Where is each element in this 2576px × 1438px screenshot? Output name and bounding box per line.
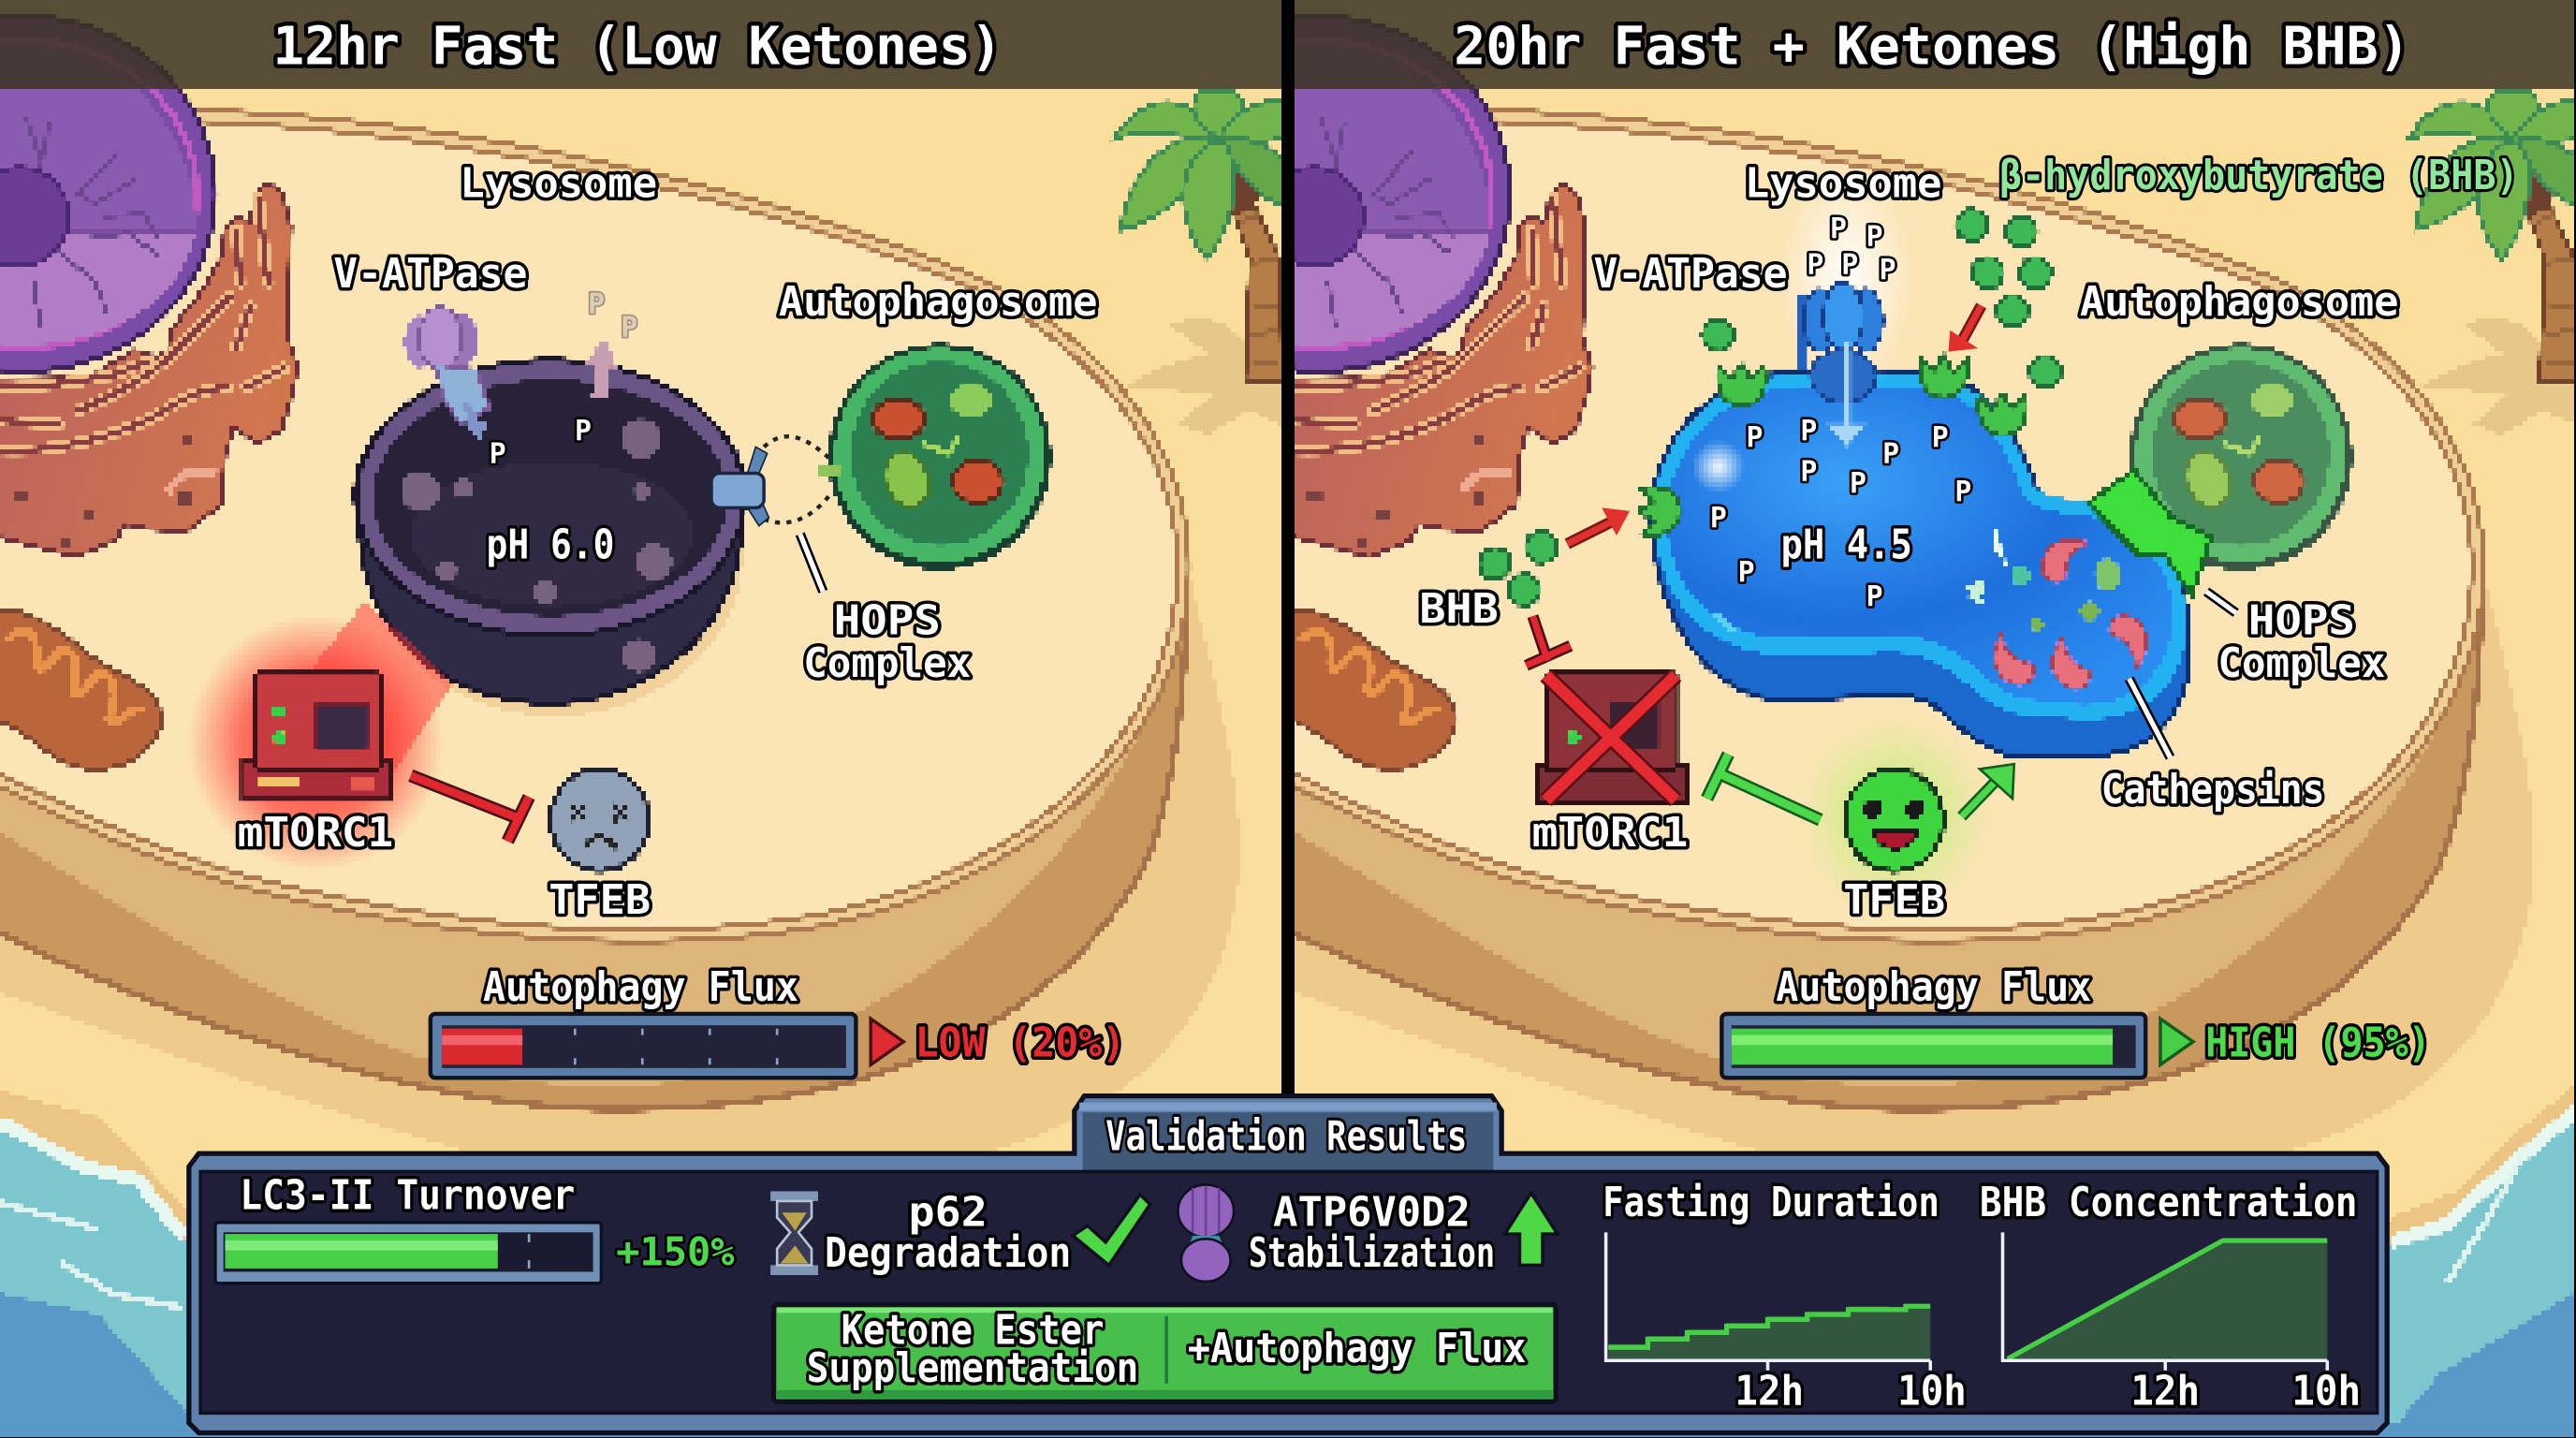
- protons in lysosome: P: [1800, 456, 1817, 489]
- arrow: TFEB activates lysosome: [1962, 764, 2014, 816]
- icon: mTORC1 inhibited: [1538, 674, 1686, 803]
- icon: up arrow: [1505, 1193, 1558, 1265]
- protons in lysosome: P: [575, 415, 592, 448]
- title bar right: [1292, 0, 2576, 91]
- protons above pump: [1807, 213, 1896, 286]
- icon: nucleus: [1129, 17, 1510, 372]
- faded protons: P: [588, 288, 605, 321]
- labels: Autophagosome: [2080, 278, 2398, 326]
- protons above pump: P: [1866, 221, 1883, 254]
- protons above pump: P: [1830, 213, 1847, 245]
- results tab: Validation Results: [1105, 1113, 1467, 1161]
- labels: V-ATPase: [333, 250, 527, 298]
- fused autolysosome, active: [1651, 372, 2189, 756]
- ketone ester callout: [774, 1305, 1556, 1401]
- ketone ester callout: Supplementation: [807, 1344, 1138, 1392]
- icon: palm tree: [1109, 89, 1281, 435]
- p62 degradation metric: Degradation: [825, 1229, 1071, 1277]
- lysosome, inactive: [355, 360, 746, 716]
- protons in lysosome: [1710, 415, 1971, 614]
- TFEB glow: [1793, 714, 1996, 918]
- protons in lysosome: P: [1932, 421, 1949, 454]
- protons in lysosome: P: [1882, 438, 1899, 471]
- labels: BHB: [1419, 585, 1499, 633]
- ketone ester callout: Ketone Ester: [842, 1307, 1104, 1355]
- panel frame with tab: [189, 1096, 2387, 1432]
- title right: 20hr Fast + Ketones (High BHB): [1454, 16, 2410, 77]
- icon: endoplasmic reticulum: [0, 183, 298, 557]
- ocean and wet sand: [0, 1084, 2576, 1438]
- chart: fasting duration: [1603, 1179, 1967, 1416]
- left scene artwork: [0, 0, 1281, 1208]
- labels: Lysosome: [1745, 160, 1942, 208]
- protons above pump: P: [1841, 249, 1858, 282]
- protons in lysosome: P: [1954, 476, 1971, 508]
- wet sand left: [0, 1091, 213, 1282]
- protons in lysosome: P: [1738, 556, 1755, 589]
- ocean: right corner: [2374, 1110, 2576, 1438]
- chart: fasting duration: 10h: [1897, 1368, 1967, 1416]
- pH value: pH 6.0: [487, 521, 614, 569]
- labels: [238, 160, 1097, 924]
- BHB molecules: [1479, 210, 2061, 606]
- icon: V-ATPase, weak: [404, 307, 490, 440]
- icon: mitochondrion: [1286, 609, 1456, 770]
- V-ATPase glow: [1778, 161, 1915, 398]
- chart: BHB concentration: BHB Concentration: [1980, 1179, 2358, 1226]
- faded proton arrow: [585, 337, 618, 399]
- protons in lysosome: [490, 415, 592, 471]
- sea strip below results panel: [165, 1423, 2415, 1438]
- faded protons: [588, 288, 637, 345]
- protons in lysosome: P: [1866, 581, 1883, 614]
- inhibition: TFEB to mTORC1: [1707, 755, 1821, 820]
- cell on beach: [0, 0, 1281, 1208]
- icon: TFEB active face: [1845, 769, 1943, 871]
- labels: TFEB: [549, 876, 651, 924]
- title left: 12hr Fast (Low Ketones): [272, 16, 1003, 77]
- title bar left: [0, 0, 1284, 91]
- labels: Autophagosome: [779, 278, 1097, 326]
- cell on beach: [1229, 0, 2576, 1438]
- leader line: HOPS: [2206, 592, 2236, 613]
- icon: endoplasmic reticulum: [1278, 183, 1592, 557]
- labels: TFEB: [1843, 876, 1945, 924]
- labels: Complex: [2217, 639, 2385, 687]
- right scene artwork: [1129, 0, 2576, 1438]
- protons in lysosome: P: [490, 438, 506, 471]
- icon: nucleus: [0, 17, 215, 372]
- ocean: left corner: [0, 1123, 205, 1438]
- labels: V-ATPase: [1593, 250, 1788, 298]
- ketone ester callout: +Autophagy Flux: [1188, 1325, 1526, 1372]
- flux gauge: high: Autophagy Flux: [1776, 963, 2091, 1011]
- ATP6V0D2 stabilization metric: Stabilization: [1249, 1229, 1495, 1277]
- leader line: HOPS: [800, 534, 823, 592]
- left panel annotations: [238, 16, 1125, 1078]
- LC3-II turnover metric: LC3-II Turnover: [240, 1172, 575, 1220]
- LC3-II turnover metric: +150%: [616, 1228, 735, 1274]
- autophagosome: [2130, 344, 2352, 570]
- BHB receptors: [1638, 355, 2027, 535]
- flux gauge: high: HIGH (95%): [2205, 1020, 2431, 1067]
- HOPS tether, failed fusion: [711, 436, 842, 526]
- cathepsins and debris: [1965, 526, 2158, 694]
- chart: fasting duration: Fasting Duration: [1603, 1179, 1939, 1226]
- labels: Cathepsins: [2101, 766, 2324, 814]
- chart: BHB concentration: [1980, 1179, 2361, 1416]
- protons in lysosome: P: [1800, 415, 1817, 448]
- labels: mTORC1: [238, 809, 393, 857]
- labels: HOPS: [2248, 596, 2355, 644]
- pH value: pH 4.5: [1781, 521, 1912, 569]
- inhibition arrow: mTORC1 to TFEB: [411, 775, 529, 842]
- labels: Lysosome: [460, 160, 657, 208]
- labels: Complex: [803, 639, 971, 687]
- icon: mTORC1 active machine: [243, 674, 391, 800]
- icon: mitochondrion: [0, 609, 161, 770]
- flux gauge: low: LOW (20%): [915, 1020, 1125, 1067]
- protons in lysosome: P: [1850, 468, 1866, 501]
- protons in lysosome: P: [1710, 502, 1727, 535]
- labels: mTORC1: [1532, 809, 1688, 857]
- mTORC1 cross-out: [1546, 675, 1676, 800]
- arrows: BHB activation: [1567, 305, 1982, 544]
- panel: 12hr fast, low ketones: [0, 0, 1281, 1208]
- protons in lysosome: P: [1746, 421, 1763, 454]
- leader line: cathepsins: [2130, 679, 2170, 757]
- icon: TFEB inactive face: [550, 769, 649, 871]
- mTORC1 red glow: [187, 601, 453, 871]
- autophagosome: [828, 344, 1051, 570]
- flux gauge: high: [1721, 963, 2431, 1078]
- inhibition: BHB to mTORC1: [1526, 616, 1571, 666]
- ATP6V0D2 stabilization metric: [1249, 1188, 1495, 1277]
- LC3-II turnover metric: [215, 1172, 735, 1284]
- HOPS fusion bridge: [2088, 470, 2211, 594]
- results panel: [189, 1096, 2387, 1432]
- wet sand right: [2365, 1084, 2576, 1249]
- chart: fasting duration: 12h: [1734, 1368, 1804, 1416]
- results tab: [1079, 1103, 1497, 1171]
- icon: palm tree: [2408, 91, 2576, 435]
- faded protons: P: [621, 312, 637, 345]
- icon: ATP6V0D2 protein: [1178, 1184, 1234, 1282]
- protons above pump: P: [1807, 249, 1823, 282]
- right panel annotations: [1419, 16, 2519, 1078]
- p62 degradation metric: [825, 1188, 1071, 1277]
- labels: β-hydroxybutyrate (BHB): [1999, 152, 2519, 199]
- panel: 20hr fast plus ketones: [1129, 0, 2576, 1438]
- labels: HOPS: [834, 596, 941, 644]
- flux gauge: low: Autophagy Flux: [483, 963, 798, 1011]
- icon: check mark: [1073, 1195, 1150, 1265]
- protons above pump: P: [1880, 254, 1896, 286]
- icon: hourglass: [770, 1191, 818, 1275]
- labels: [1419, 152, 2519, 924]
- center divider: [1281, 0, 1295, 1105]
- chart: BHB concentration: 12h: [2130, 1368, 2200, 1416]
- panel body: [200, 1171, 2378, 1413]
- p62 degradation metric: p62: [909, 1188, 988, 1236]
- ATP6V0D2 stabilization metric: ATP6V0D2: [1273, 1188, 1471, 1236]
- flux gauge: low: [431, 963, 1125, 1078]
- icon: V-ATPase, active: [1799, 283, 1882, 447]
- chart: BHB concentration: 10h: [2291, 1368, 2361, 1416]
